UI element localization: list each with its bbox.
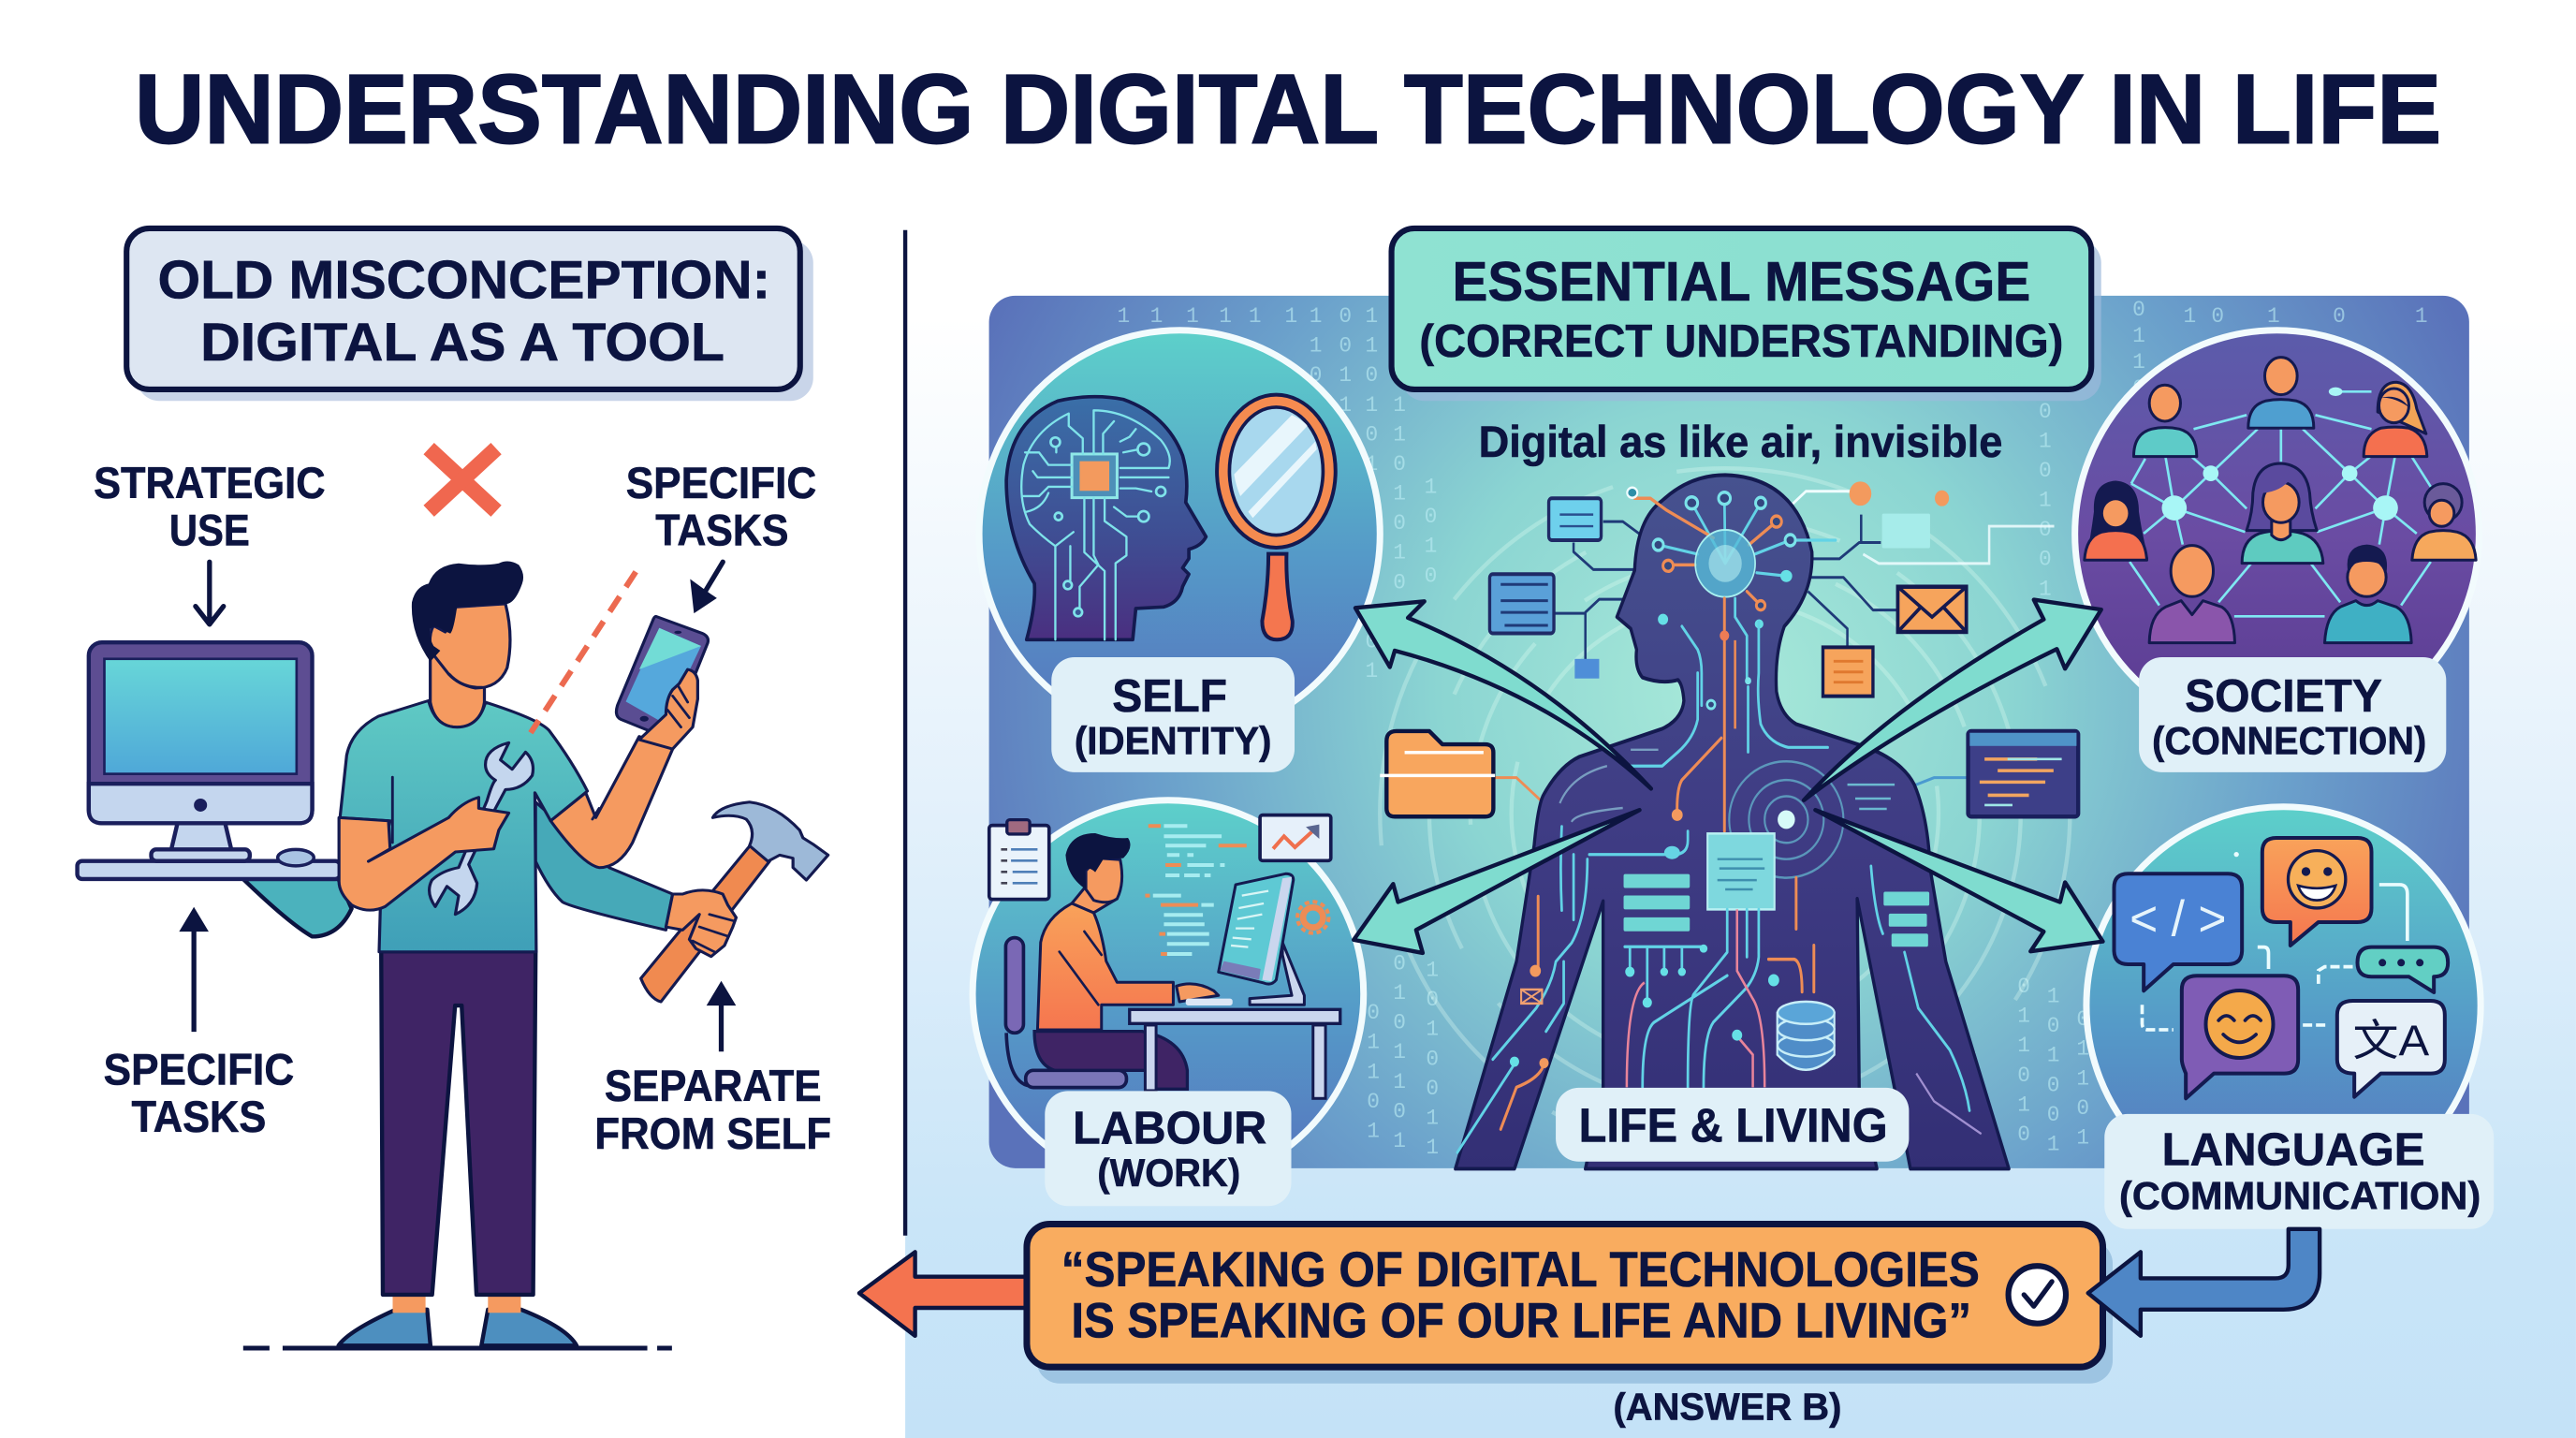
circle: labour work bbox=[973, 800, 1364, 1206]
hand on phone bbox=[639, 669, 697, 749]
binary digit rain: 011010 bbox=[1339, 334, 1352, 506]
label: specific tasks top bbox=[626, 459, 816, 556]
label: life and living bbox=[1556, 1088, 1909, 1162]
icon: database bbox=[1778, 1002, 1835, 1070]
label: labour work bbox=[1045, 1091, 1292, 1206]
brain circuitry bbox=[1634, 492, 1836, 628]
label: separate from self: SEPARATE bbox=[605, 1062, 822, 1111]
code lines bbox=[1145, 826, 1247, 954]
label: specific tasks top: TASKS bbox=[655, 506, 788, 556]
neck bbox=[431, 649, 485, 727]
shirt bbox=[340, 700, 588, 952]
illustration background bbox=[989, 296, 2469, 1168]
icon: envelope bbox=[1897, 587, 1967, 632]
binary digit rain: 10101 bbox=[1310, 334, 1323, 477]
arrow: specific tasks to phone bbox=[692, 562, 723, 611]
quote box: “SPEAKING OF DIGITAL TECHNOLOGIES bbox=[1061, 1242, 1980, 1298]
binary digit rain: 1010 bbox=[1425, 476, 1437, 588]
heading: essential message: ESSENTIAL MESSAGE bbox=[1453, 250, 2030, 313]
icon: desktop computer bbox=[78, 642, 352, 936]
binary digit rain: 1010011 bbox=[1426, 958, 1439, 1160]
people network bbox=[2085, 358, 2476, 643]
answer note: (ANSWER B) bbox=[1613, 1385, 1841, 1428]
label: specific tasks bottom bbox=[104, 1045, 294, 1142]
icon: code speech bubble: < / > bbox=[2130, 891, 2227, 946]
label: life and living: LIFE & LIVING bbox=[1579, 1099, 1888, 1152]
trousers bbox=[381, 951, 535, 1295]
heading: essential message: (CORRECT UNDERSTANDING) bbox=[1419, 316, 2063, 367]
data chip bbox=[1589, 831, 1775, 909]
binary digit rain: 011010 bbox=[2017, 975, 2030, 1147]
label: society connection: (CONNECTION) bbox=[2152, 719, 2426, 763]
arrow: life to language bbox=[1815, 810, 2102, 951]
upper body bbox=[339, 562, 828, 1002]
subtitle: digital as like air: Digital as like air, invisible bbox=[1479, 418, 2002, 467]
status rows bbox=[1624, 874, 1929, 946]
outside connectors bbox=[1495, 492, 2055, 822]
panel: old misconception bbox=[78, 228, 831, 1348]
icon: typing speech bubble bbox=[2358, 947, 2448, 992]
circle: society connection bbox=[2075, 330, 2479, 772]
binary digit rain: 10101 bbox=[2183, 304, 2428, 329]
lower traces bbox=[1457, 827, 1982, 1152]
binary digit rain: 01101 bbox=[1367, 1001, 1380, 1143]
vertical divider bbox=[904, 230, 906, 1236]
arrow: separate from self to hammer bbox=[707, 981, 736, 1051]
binary digit rain: 01101 bbox=[2132, 298, 2145, 427]
arrow: life to society bbox=[1804, 600, 2101, 800]
hair bbox=[412, 562, 523, 662]
self illustration bbox=[1006, 395, 1336, 639]
quote box: IS SPEAKING OF OUR LIFE AND LIVING” bbox=[1071, 1294, 1971, 1349]
face bbox=[430, 604, 510, 688]
label: separate from self bbox=[594, 1062, 831, 1159]
icon: red cross bbox=[429, 448, 496, 511]
arrow: life to labour bbox=[1354, 810, 1640, 953]
icon: happy speech bubble bbox=[2262, 838, 2372, 946]
labour illustration bbox=[989, 815, 1340, 1098]
icon: folder bbox=[1380, 731, 1495, 816]
quote box bbox=[1027, 1224, 2113, 1384]
icon: code speech bubble bbox=[2115, 873, 2242, 990]
icon: floating documents bbox=[1489, 481, 1949, 679]
label: strategic use bbox=[94, 459, 326, 556]
radial rings bbox=[1380, 468, 2070, 1158]
icon: clipboard bbox=[989, 820, 1049, 900]
ground line bbox=[243, 1347, 672, 1349]
label: labour work: (WORK) bbox=[1097, 1151, 1240, 1195]
icon: chart card bbox=[1260, 815, 1331, 860]
label: separate from self: FROM SELF bbox=[594, 1109, 831, 1159]
label: language communication: LANGUAGE bbox=[2162, 1124, 2424, 1175]
network lines bbox=[2130, 388, 2431, 616]
icon: check mark bbox=[2009, 1266, 2066, 1324]
language illustration bbox=[2115, 838, 2448, 1098]
arrow: specific tasks to desk bbox=[193, 927, 196, 1032]
hammer bbox=[641, 802, 828, 1002]
figure: person with tools bbox=[243, 562, 828, 1348]
arrow: blue arrow from language bbox=[2088, 1229, 2320, 1336]
label: society connection bbox=[2139, 657, 2446, 772]
icon: seated worker bbox=[1034, 833, 1233, 1089]
icon: code window bbox=[1969, 731, 2078, 816]
icon: head with circuit brain bbox=[1006, 397, 1206, 639]
callout: quote with arrows bbox=[859, 1224, 2320, 1428]
label: specific tasks bottom: SPECIFIC bbox=[104, 1045, 294, 1094]
circle: self identity bbox=[979, 330, 1380, 772]
binary digit rain: 0101001 bbox=[2039, 400, 2052, 601]
neck and chest traces bbox=[1559, 598, 1895, 831]
shoes bbox=[339, 1310, 577, 1345]
icon: gear bbox=[1297, 902, 1328, 933]
arrowhead: desk bbox=[179, 907, 209, 932]
smile bbox=[449, 674, 482, 687]
wrench bbox=[430, 742, 533, 915]
binary digit rain: 101001 bbox=[2047, 985, 2060, 1157]
arm raising phone bbox=[550, 737, 673, 868]
label: strategic use: USE bbox=[169, 506, 250, 556]
label: specific tasks bottom: TASKS bbox=[131, 1093, 266, 1142]
binary digit rain bbox=[1117, 298, 2428, 1160]
society illustration bbox=[2085, 358, 2476, 643]
icon: desk and monitor bbox=[1130, 873, 1340, 1098]
label: language communication: (COMMUNICATION) bbox=[2119, 1174, 2481, 1218]
binary digit rain: 101011010101 bbox=[1365, 334, 1378, 683]
arrow: strategic use to computer bbox=[196, 562, 224, 624]
ankles bbox=[393, 1291, 520, 1313]
chest target rings bbox=[1729, 761, 1843, 878]
sleeve seam bbox=[388, 777, 396, 843]
label: specific tasks top: SPECIFIC bbox=[626, 459, 816, 508]
label: self identity bbox=[1051, 657, 1295, 772]
hand on hammer bbox=[666, 890, 736, 957]
label: strategic use: STRATEGIC bbox=[94, 459, 326, 508]
icon: chair bbox=[1005, 938, 1126, 1088]
arm holding wrench bbox=[339, 798, 509, 910]
arrow: life to self bbox=[1355, 601, 1651, 788]
binary digit rain: 110101001 bbox=[1393, 393, 1406, 653]
label: self identity: SELF bbox=[1112, 671, 1227, 722]
label: self identity: (IDENTITY) bbox=[1075, 719, 1271, 763]
icon: translate speech bubble: 文A bbox=[2353, 1017, 2430, 1065]
heading: old misconception: DIGITAL AS A TOOL bbox=[200, 313, 724, 373]
central human silhouette with circuits bbox=[1456, 475, 2055, 1168]
title: UNDERSTANDING DIGITAL TECHNOLOGY IN LIFE bbox=[135, 55, 2441, 165]
dashed connector bbox=[531, 572, 636, 733]
icon: hand mirror bbox=[1217, 395, 1336, 639]
icon: smile speech bubble bbox=[2182, 976, 2298, 1098]
arrow: red arrow left bbox=[859, 1252, 1035, 1336]
phone bbox=[616, 616, 708, 736]
teal forearm bbox=[535, 802, 673, 930]
heading: essential message bbox=[1392, 228, 2101, 401]
connector lines bbox=[2143, 852, 2408, 1030]
label: labour work: LABOUR bbox=[1073, 1103, 1266, 1153]
icon: translate speech bubble bbox=[2337, 1001, 2445, 1097]
binary digit rain: 0101101 bbox=[1393, 951, 1406, 1153]
label: society connection: SOCIETY bbox=[2185, 671, 2382, 722]
circle: language communication bbox=[2086, 807, 2494, 1229]
binary digit rain: 01101 bbox=[2076, 1007, 2089, 1150]
binary digit rain: 111111101 bbox=[1117, 304, 1378, 329]
heading: old misconception bbox=[126, 228, 813, 401]
label: language communication bbox=[2104, 1114, 2494, 1229]
body outline bbox=[1456, 475, 2009, 1168]
heading: old misconception: OLD MISCONCEPTION: bbox=[158, 251, 770, 311]
icon: orange document bbox=[1822, 647, 1873, 697]
panel: essential message bbox=[973, 228, 2494, 1229]
